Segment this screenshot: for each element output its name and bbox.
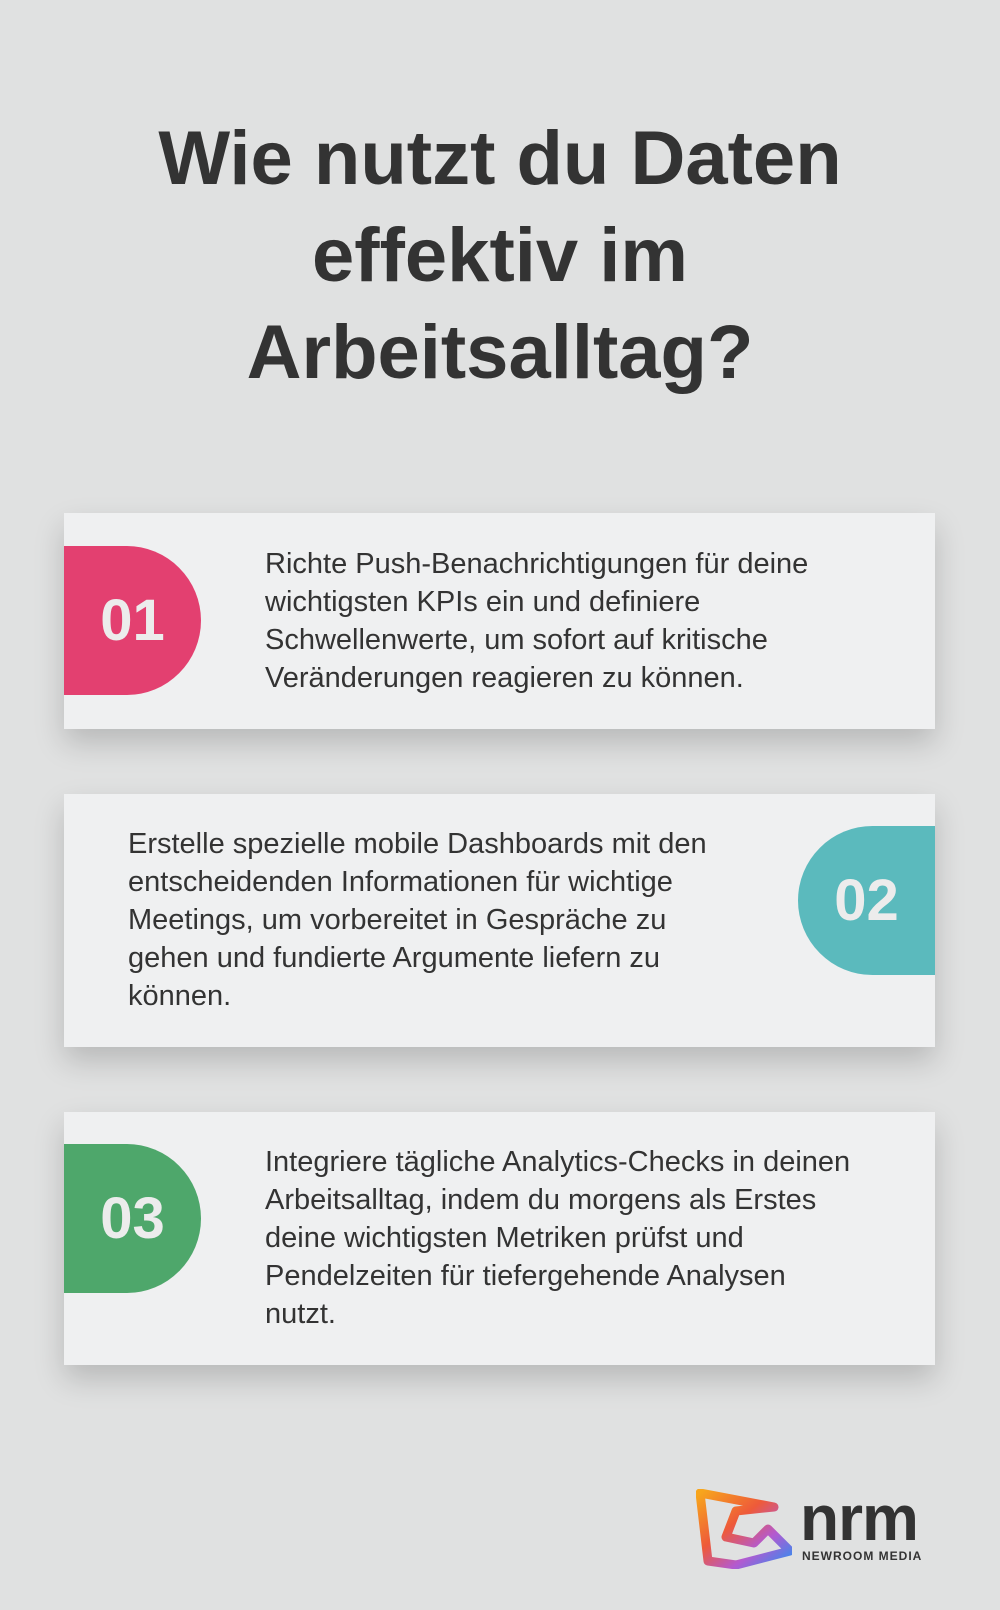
badge 01: 01 xyxy=(100,588,165,653)
badge 02: 02 xyxy=(834,868,899,933)
badge 03: 03 xyxy=(100,1186,165,1251)
text 03: Pendelzeiten für tiefergehende Analysen xyxy=(265,1260,786,1292)
logo text: nrm xyxy=(800,1482,918,1554)
title: effektiv im xyxy=(312,213,688,298)
text 01: Richte Push-Benachrichtigungen für deine xyxy=(265,548,808,580)
text 03: deine wichtigsten Metriken prüfst und xyxy=(265,1222,744,1254)
title xyxy=(158,116,842,395)
text 02: Meetings, um vorbereitet in Gespräche zu xyxy=(128,904,666,936)
panel: step 02 xyxy=(64,794,935,1047)
badge 01 xyxy=(64,546,201,695)
text 02: Erstelle spezielle mobile Dashboards mit den xyxy=(128,828,707,860)
text 01: Veränderungen reagieren zu können. xyxy=(265,662,744,694)
logo: NEWROOM MEDIA xyxy=(802,1549,922,1563)
badge 03 xyxy=(64,1144,201,1293)
logo xyxy=(696,1482,922,1569)
icon: logo mark xyxy=(696,1489,792,1569)
text 01: wichtigsten KPIs ein und definiere xyxy=(265,586,700,618)
text 02: gehen und fundierte Argumente liefern zu xyxy=(128,942,660,974)
title: Wie nutzt du Daten xyxy=(158,116,842,201)
panel: step 03 xyxy=(64,1112,935,1365)
text 01 xyxy=(265,548,808,694)
text 02: können. xyxy=(128,980,231,1012)
text 03: Arbeitsalltag, indem du morgens als Erstes xyxy=(265,1184,816,1216)
text 01: Schwellenwerte, um sofort auf kritische xyxy=(265,624,768,656)
text 02 xyxy=(128,828,707,1012)
text 02: entscheidenden Informationen für wichtige xyxy=(128,866,673,898)
text 03 xyxy=(265,1146,850,1330)
title: Arbeitsalltag? xyxy=(247,310,753,395)
panel: step 01 xyxy=(64,513,935,729)
text 03: Integriere tägliche Analytics-Checks in deinen xyxy=(265,1146,850,1178)
text 03: nutzt. xyxy=(265,1298,336,1330)
badge 02 xyxy=(798,826,935,975)
